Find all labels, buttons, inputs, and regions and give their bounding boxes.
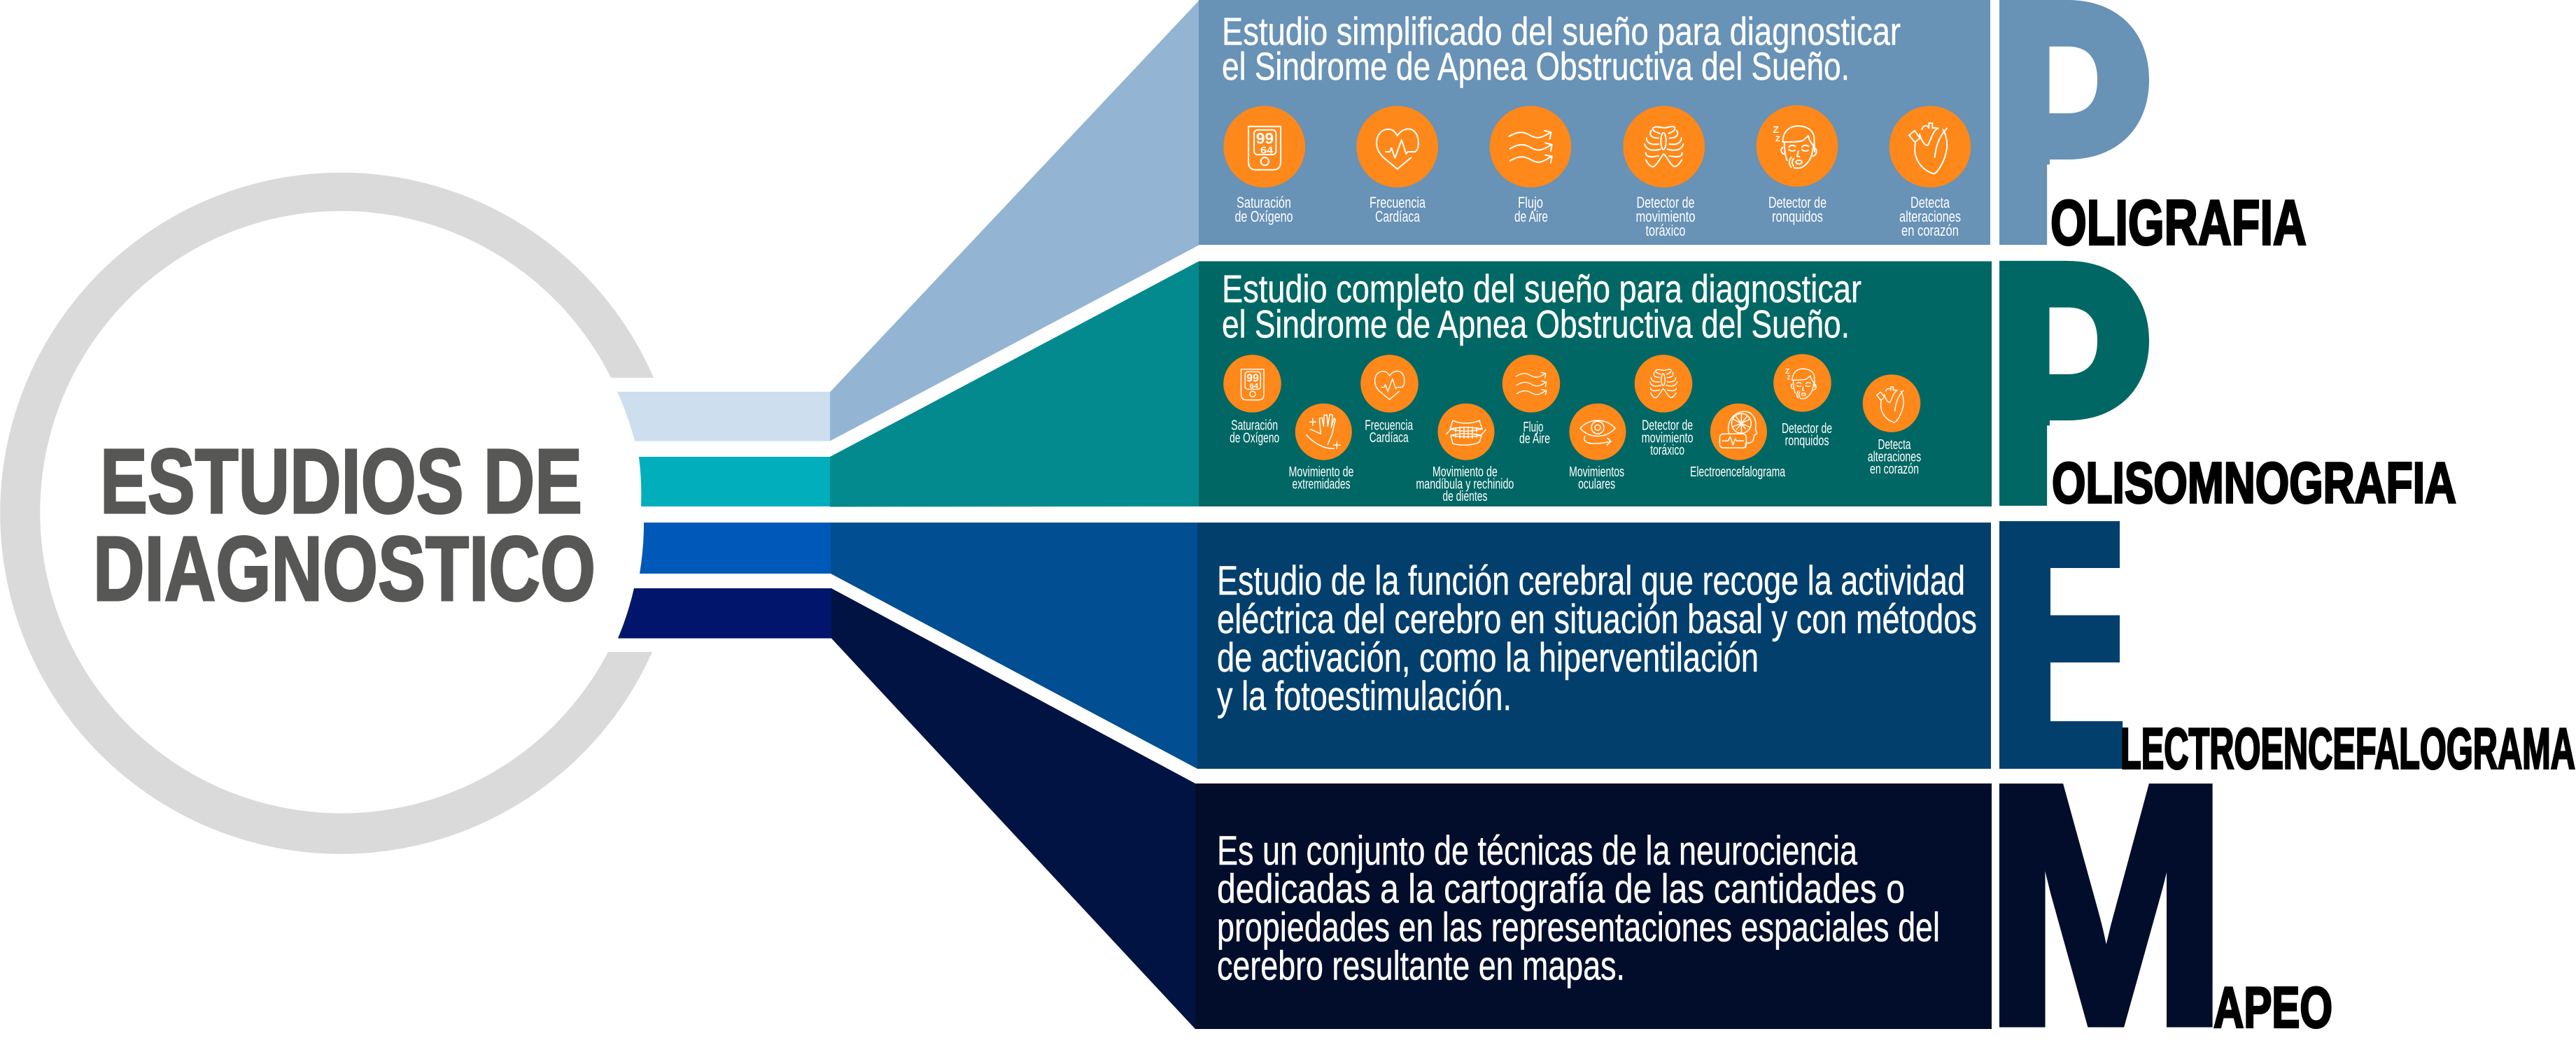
icon labels panel 2: mandíbula y rechinido <box>1416 477 1514 492</box>
icon labels panel 2: extremidades <box>1292 477 1351 492</box>
connector band 1 <box>617 392 830 441</box>
connector band 3 <box>640 523 831 574</box>
icon: ronquidos: Z <box>1775 135 1780 143</box>
panel 2 heading <box>1222 267 1861 346</box>
panel 1 heading: el Sindrome de Apnea Obstructiva del Sueño. <box>1222 44 1850 88</box>
icon labels panel 2: ronquidos <box>1785 433 1829 448</box>
icon labels panel 1: Detector de <box>1636 194 1695 211</box>
panel 2 heading: Estudio completo del sueño para diagnosticar <box>1222 267 1861 311</box>
icon labels panel 1: movimiento <box>1636 208 1695 225</box>
panel 4 text: propiedades en las representaciones espaciales del <box>1217 905 1940 951</box>
icon: electroencefalograma <box>1710 404 1767 460</box>
icon: movimiento toracico <box>1635 355 1692 413</box>
icon: saturacion de oxigeno: 99 <box>1256 130 1274 148</box>
icon labels panel 1: Flujo <box>1518 194 1543 211</box>
title: estudios de diagnostico: DIAGNOSTICO <box>93 517 596 620</box>
funnel 3 <box>831 523 1197 769</box>
panel 1 heading: Estudio simplificado del sueño para diagnosticar <box>1222 9 1901 53</box>
icon: ronquidos: Z <box>1785 368 1789 376</box>
label: apeo: APEO <box>2213 975 2332 1040</box>
icon labels panel 2: Movimiento de <box>1289 464 1353 480</box>
icon: movimiento de extremidades <box>1295 404 1352 460</box>
icon: frecuencia cardiaca <box>1360 355 1419 413</box>
panel 4 text <box>1217 828 1940 989</box>
icon labels panel 2: de Oxígeno <box>1230 431 1279 446</box>
letter E: electroencefalograma: E <box>1990 454 2127 834</box>
icon labels panel 1: Saturación <box>1237 194 1291 211</box>
icon labels panel 1 <box>1234 194 1961 239</box>
icon: saturacion de oxigeno <box>1223 355 1281 413</box>
icon labels panel 2: de dientes <box>1442 489 1487 504</box>
icon labels panel 1: ronquidos <box>1772 208 1823 225</box>
icon labels panel 2: Flujo <box>1523 420 1544 435</box>
funnel 1 <box>830 0 1199 441</box>
icon labels panel 2: Detector de <box>1782 421 1832 437</box>
icon: ronquidos: Z <box>1773 124 1779 135</box>
panel 3 text: y la fotoestimulación. <box>1217 674 1512 719</box>
panel 4 text: dedicadas a la cartografía de las cantidades o <box>1217 867 1905 912</box>
letter P: polisomnografia: P <box>1989 198 2153 568</box>
icon labels panel 2: Frecuencia <box>1365 418 1414 434</box>
panel: poligrafia <box>1199 0 1990 245</box>
icon: flujo de aire <box>1490 106 1571 187</box>
circle ring <box>0 173 654 854</box>
icon: mandibula y dientes <box>1437 404 1495 460</box>
icon labels panel 1: Cardíaca <box>1375 208 1421 225</box>
icon labels panel 2: Movimiento de <box>1433 464 1498 480</box>
panel 1 heading <box>1222 9 1901 88</box>
funnel 2 <box>830 262 1199 506</box>
icon labels panel 2: Cardíaca <box>1370 430 1409 446</box>
panel: polisomnografia <box>1199 262 1992 506</box>
icon labels panel 1: Detecta <box>1910 194 1950 211</box>
icon: saturacion de oxigeno <box>1223 106 1305 187</box>
icon: ronquidos: Z <box>1787 375 1791 381</box>
icon labels panel 2: toráxico <box>1650 443 1684 458</box>
icon: movimiento toracico <box>1623 106 1705 187</box>
panel 2 heading: el Sindrome de Apnea Obstructiva del Sueño. <box>1222 302 1850 346</box>
icon labels panel 2: Movimientos <box>1569 464 1624 480</box>
icon labels panel 1: toráxico <box>1646 222 1685 239</box>
icon labels panel 2: Saturación <box>1231 418 1278 434</box>
icon labels panel 2: Detector de <box>1642 418 1693 434</box>
icon: corazon <box>1863 374 1920 432</box>
label: olisomnografia: OLISOMNOGRAFIA <box>2052 450 2456 515</box>
panel 3 text: eléctrica del cerebro en situación basal y con métodos <box>1217 597 1977 642</box>
icon: movimientos oculares <box>1569 404 1626 460</box>
icon labels panel 2: Detecta <box>1878 437 1911 453</box>
panel: mapeo <box>1195 783 1992 1029</box>
panel 3 text: Estudio de la función cerebral que recoge la actividad <box>1217 558 1965 604</box>
icon labels panel 2: alteraciones <box>1868 450 1921 465</box>
icon: corazon <box>1889 106 1971 187</box>
icon labels panel 1: de Aire <box>1514 208 1548 225</box>
icon labels panel 2: en corazón <box>1870 462 1919 477</box>
funnel 4 <box>831 588 1195 1029</box>
icon labels panel 1: alteraciones <box>1899 208 1961 225</box>
icon labels panel 2 <box>1230 418 1921 504</box>
panel 3 text <box>1217 558 1977 719</box>
icon labels panel 2: de Aire <box>1519 432 1550 447</box>
icon: ronquidos <box>1773 354 1831 412</box>
icon: flujo de aire <box>1502 355 1560 413</box>
connector band 2 <box>639 457 831 506</box>
label: oligrafia: OLIGRAFIA <box>2050 187 2307 259</box>
panel 4 text: cerebro resultante en mapas. <box>1217 944 1625 989</box>
icon: ronquidos <box>1757 105 1838 187</box>
icon labels panel 1: en corazón <box>1901 222 1959 239</box>
icon: frecuencia cardiaca <box>1356 106 1438 187</box>
icon: saturacion de oxigeno: 64 <box>1249 383 1258 390</box>
title: estudios de diagnostico <box>93 430 596 620</box>
icon labels panel 2: oculares <box>1578 477 1615 492</box>
panel 4 text: Es un conjunto de técnicas de la neurociencia <box>1217 828 1858 874</box>
icon: saturacion de oxigeno: 99 <box>1246 373 1259 385</box>
connector band 4 <box>618 588 831 638</box>
icon labels panel 1: Detector de <box>1768 194 1827 211</box>
icon labels panel 2: movimiento <box>1642 431 1694 446</box>
icon labels panel 1: Frecuencia <box>1370 194 1426 211</box>
icon: saturacion de oxigeno: 64 <box>1260 145 1274 156</box>
icon labels panel 1: de Oxígeno <box>1234 208 1293 225</box>
panel 3 text: de activación, como la hiperventilación <box>1217 635 1759 681</box>
title: estudios de diagnostico: ESTUDIOS DE <box>100 430 582 532</box>
icon labels panel 2: Electroencefalograma <box>1690 464 1786 480</box>
panel: electroencefalograma <box>1197 523 1991 769</box>
